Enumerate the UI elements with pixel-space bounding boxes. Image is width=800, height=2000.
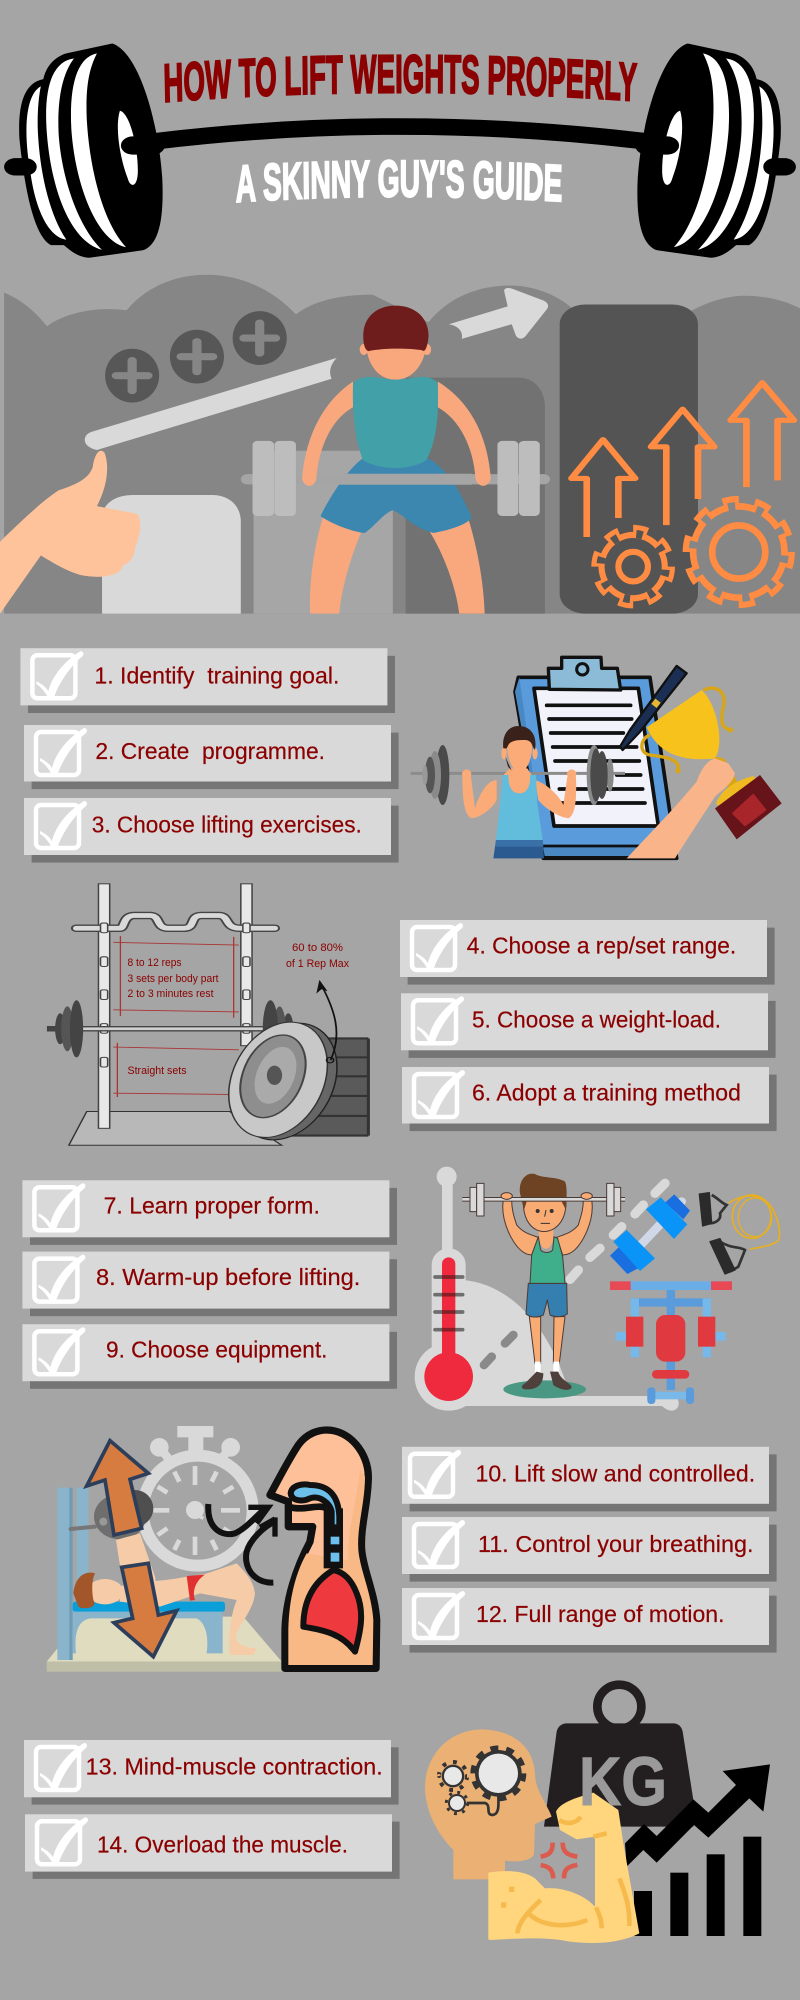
text block: rep notes [128,957,218,1077]
stacked plates [286,1038,368,1136]
arrow: small upward arrow [449,288,548,339]
text: step 2: 2. Create programme. [95,738,325,764]
icon: thumbs up [0,451,140,614]
icon: thermometer [415,1167,679,1411]
icon: resistance bands [699,1193,780,1274]
card 1 [20,648,395,713]
arrow: long rising bar [85,358,337,450]
card 11 [402,1517,777,1582]
arrow: growth [625,1764,770,1867]
text: step 13: 13. Mind-muscle contraction. [86,1753,383,1779]
text: step 5: 5. Choose a weight-load. [472,1006,721,1032]
text block: rep notes: Straight sets [128,1065,187,1077]
card 14 [25,1814,400,1879]
text: step 12: 12. Full range of motion. [476,1601,724,1627]
icon: growth bars [634,1837,761,1936]
lifter with bar overhead [462,1174,625,1398]
text: step 8: 8. Warm-up before lifting. [96,1264,360,1290]
illustration: mind, muscle, weight and growth [425,1685,770,1943]
lifter with barbell at shoulders [411,726,625,858]
card 7 [22,1180,397,1245]
text: step 3: 3. Choose lifting exercises. [92,812,362,838]
subtitle [236,159,562,203]
icon: plus signs [105,311,287,403]
text block: rep notes: 3 sets per body part [128,973,218,985]
arrow: to plate [316,980,337,1063]
text: step 7: 7. Learn proper form. [104,1193,320,1219]
big weight plate [214,1016,352,1146]
illustration: bench press, stopwatch and breathing [47,1426,377,1672]
text block: rep notes: 8 to 12 reps [128,957,182,969]
icon: anger mark [541,1843,577,1878]
text: step 10: 10. Lift slow and controlled. [476,1461,755,1487]
card 10 [402,1447,777,1511]
icon: clipboard [515,657,677,858]
icon: stopwatch [143,1426,253,1566]
icon: trophy and hand [627,688,782,858]
text: step 1: 1. Identify training goal. [94,663,339,689]
subtitle: A SKINNY GUY'S GUIDE [236,159,562,203]
text block: load note: of 1 Rep Max [286,958,349,970]
illustration: lifter with clipboard and trophy [411,657,782,858]
icon: head with gears [425,1729,552,1879]
arrow: breath arrows [208,1504,275,1583]
card 5 [401,993,776,1058]
text: step 9: 9. Choose equipment. [106,1337,327,1363]
illustration: squat rack with weights [47,884,368,1146]
bench presser [73,1533,257,1655]
bench and platform [47,1488,282,1672]
illustration: thermometer, lifter and equipment [415,1167,780,1411]
icon: flexed arm [488,1793,639,1943]
text: step 14: 14. Overload the muscle. [97,1831,348,1857]
lifter figure [302,306,491,614]
card 6 [402,1067,777,1131]
card 13 [24,1740,399,1805]
text: step 4: 4. Choose a rep/set range. [467,932,736,958]
panel: hero scene of lifter [0,275,800,614]
icon: orange arrows [571,383,794,537]
text: step 11: 11. Control your breathing. [478,1531,754,1557]
text block: load note [286,942,349,970]
card 3 [24,798,399,863]
icon: large gear [689,502,789,602]
icon: small gear [596,530,670,603]
card 8 [22,1252,397,1316]
icon: barbell header [15,43,785,258]
icon: breathing torso [270,1430,377,1668]
icon: small barbell [247,441,543,516]
card 4 [400,920,775,985]
icon: dumbbell [610,1194,690,1274]
card 2 [24,725,399,789]
icon: KG weight [544,1685,693,1827]
title: HOW TO LIFT WEIGHTS PROPERLY [164,54,638,103]
arrow: up and down lift arrow [87,1441,177,1657]
card 9 [22,1324,397,1389]
label: KG: KG [579,1743,667,1820]
text: step 6: 6. Adopt a training method [472,1079,741,1105]
text block: load note: 60 to 80% [292,942,343,954]
icon: weight bench [610,1281,732,1404]
text block: rep notes: 2 to 3 minutes rest [128,988,214,1000]
icon: pen [620,666,687,750]
red note frames [113,936,239,1097]
card 12 [402,1588,777,1653]
